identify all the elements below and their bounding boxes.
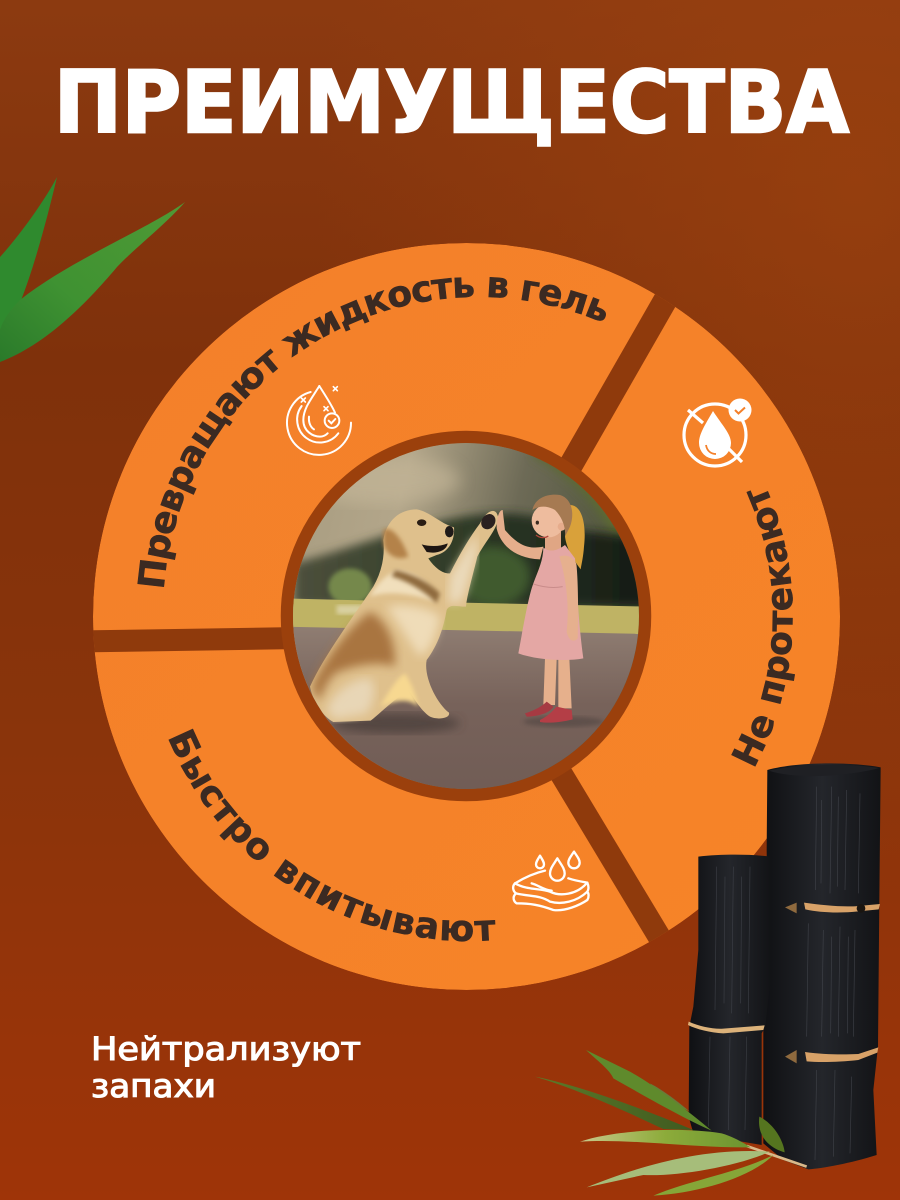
bottom leaves xyxy=(535,1050,807,1196)
icon: top-left bamboo leaves xyxy=(0,177,185,362)
girl xyxy=(497,495,585,723)
segment label: fast absorption: Быстро впитывают xyxy=(168,728,496,942)
segment label: no leaks: Не протекают xyxy=(731,490,795,767)
icon: absorbent layers with drops xyxy=(513,852,589,910)
photo: dog and girl high five xyxy=(293,443,639,789)
panel: orange ring with three segment gaps xyxy=(80,243,840,990)
icon: drop in circles xyxy=(287,386,351,455)
icon: no-leak drop xyxy=(684,398,752,466)
segment label: liquid to gel: Превращают жидкость в гель xyxy=(137,277,606,587)
short charcoal stalk xyxy=(688,855,771,1145)
title: ПРЕИМУЩЕСТВА xyxy=(54,53,849,153)
dog xyxy=(310,509,498,722)
tall charcoal stalk xyxy=(763,763,881,1169)
text block: neutralize odors: запахи xyxy=(91,1067,216,1105)
ring diagram xyxy=(93,243,840,990)
text block: neutralize odors: Нейтрализуют xyxy=(91,1030,361,1068)
photo frame ring xyxy=(287,437,645,795)
icon: bottom bamboo charcoal with leaves xyxy=(535,763,881,1196)
